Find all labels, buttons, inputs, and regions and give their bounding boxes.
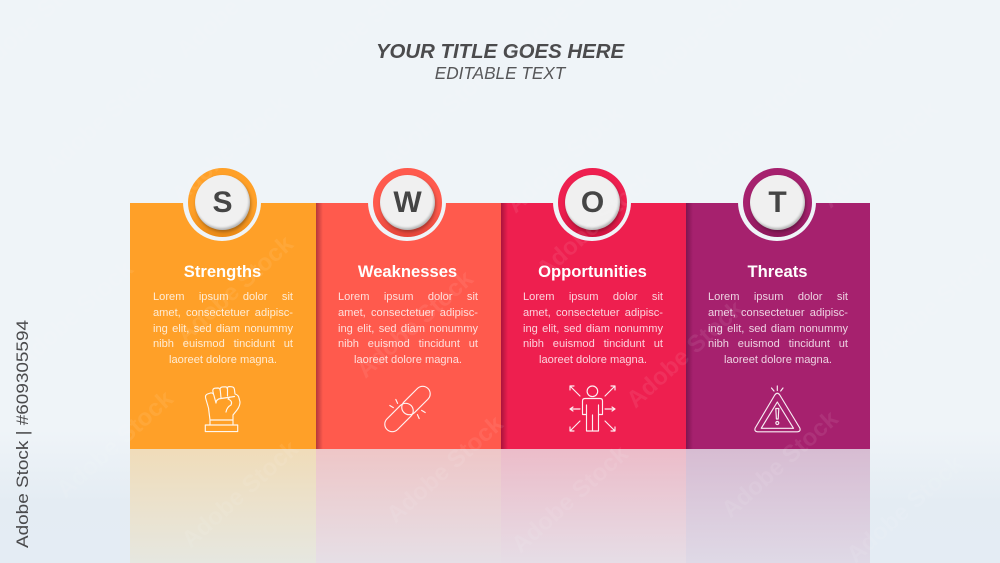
text: opportunities: Lorem ipsum dolor sit (523, 291, 663, 303)
text: strengths (153, 291, 293, 366)
text: opportunities: laoreet dolore magna. (539, 354, 647, 366)
panel: opportunities (501, 203, 686, 449)
icon: fist (204, 386, 241, 432)
text: weaknesses (338, 291, 478, 366)
reflection: opportunities (501, 449, 686, 563)
watermarks: Adobe Stock (166, 90, 294, 209)
heading: strengths: Strengths (184, 262, 261, 280)
watermarks: Adobe Stock (871, 245, 999, 364)
icon: broken chain (384, 386, 431, 432)
watermarks: Adobe Stock (506, 440, 634, 559)
watermarks: Adobe Stock (176, 435, 304, 554)
badge: W: W (393, 186, 422, 218)
text: threats: laoreet dolore magna. (724, 354, 832, 366)
text: opportunities: ing elit, sed diam nonummy (523, 322, 663, 334)
watermarks: Adobe Stock (39, 60, 167, 179)
icon: warning triangle (754, 385, 801, 432)
badge: S (183, 168, 261, 241)
panel: strengths (130, 203, 316, 449)
watermarks: Adobe Stock (171, 230, 299, 349)
icon: person with arrows (569, 385, 616, 432)
heading: weaknesses: Weaknesses (358, 262, 457, 280)
text: threats: nibh euismod tincidunt ut (708, 338, 848, 350)
panel: weaknesses (316, 203, 501, 449)
text: threats (708, 291, 848, 366)
watermarks: Adobe Stock (501, 100, 629, 219)
text: strengths: nibh euismod tincidunt ut (153, 338, 293, 350)
watermarks: Adobe Stock (351, 265, 479, 384)
text: weaknesses: ing elit, sed diam nonummy (338, 322, 478, 334)
text: opportunities (523, 291, 663, 366)
watermarks: Adobe Stock (376, 55, 504, 174)
reflection: threats (686, 449, 870, 563)
watermarks: Adobe Stock (381, 410, 509, 529)
text: strengths: laoreet dolore magna. (169, 354, 277, 366)
badge: T (738, 168, 816, 241)
reflection: strengths (130, 449, 316, 563)
watermarks: Adobe Stock (11, 255, 139, 374)
text: strengths: ing elit, sed diam nonummy (153, 322, 293, 334)
panel: threats (686, 203, 870, 449)
watermarks: Adobe Stock (531, 165, 659, 284)
watermarks: Adobe Stock (621, 295, 749, 414)
badge: O (553, 168, 631, 241)
text: weaknesses: nibh euismod tincidunt ut (338, 338, 478, 350)
watermarks: Adobe Stock (716, 405, 844, 524)
badge: W (368, 168, 446, 241)
subtitle: EDITABLE TEXT (435, 63, 565, 83)
floor background (0, 430, 1000, 563)
text: strengths: amet, consectetuer adipisc- (153, 307, 293, 319)
text: strengths: Lorem ipsum dolor sit (153, 291, 293, 303)
watermarks: Adobe Stock (51, 385, 179, 504)
text: threats: amet, consectetuer adipisc- (708, 307, 848, 319)
badge: S: S (212, 186, 232, 218)
text: weaknesses: Lorem ipsum dolor sit (338, 291, 478, 303)
title: YOUR TITLE GOES HERE (376, 40, 624, 62)
text: threats: Lorem ipsum dolor sit (708, 291, 848, 303)
text: opportunities: amet, consectetuer adipisc- (523, 307, 663, 319)
heading: opportunities: Opportunities (538, 262, 647, 280)
badge: O: O (581, 186, 604, 218)
text: weaknesses: amet, consectetuer adipisc- (338, 307, 478, 319)
text: weaknesses: laoreet dolore magna. (354, 354, 462, 366)
stock id label: Adobe Stock | #609305594 (13, 320, 32, 548)
watermarks: Adobe Stock (816, 95, 944, 214)
text: opportunities: nibh euismod tincidunt ut (523, 338, 663, 350)
badge: T: T (768, 186, 787, 218)
heading: threats: Threats (748, 262, 807, 280)
reflection: weaknesses (316, 449, 501, 563)
text: threats: ing elit, sed diam nonummy (708, 322, 848, 334)
watermarks: Adobe Stock (686, 65, 814, 184)
